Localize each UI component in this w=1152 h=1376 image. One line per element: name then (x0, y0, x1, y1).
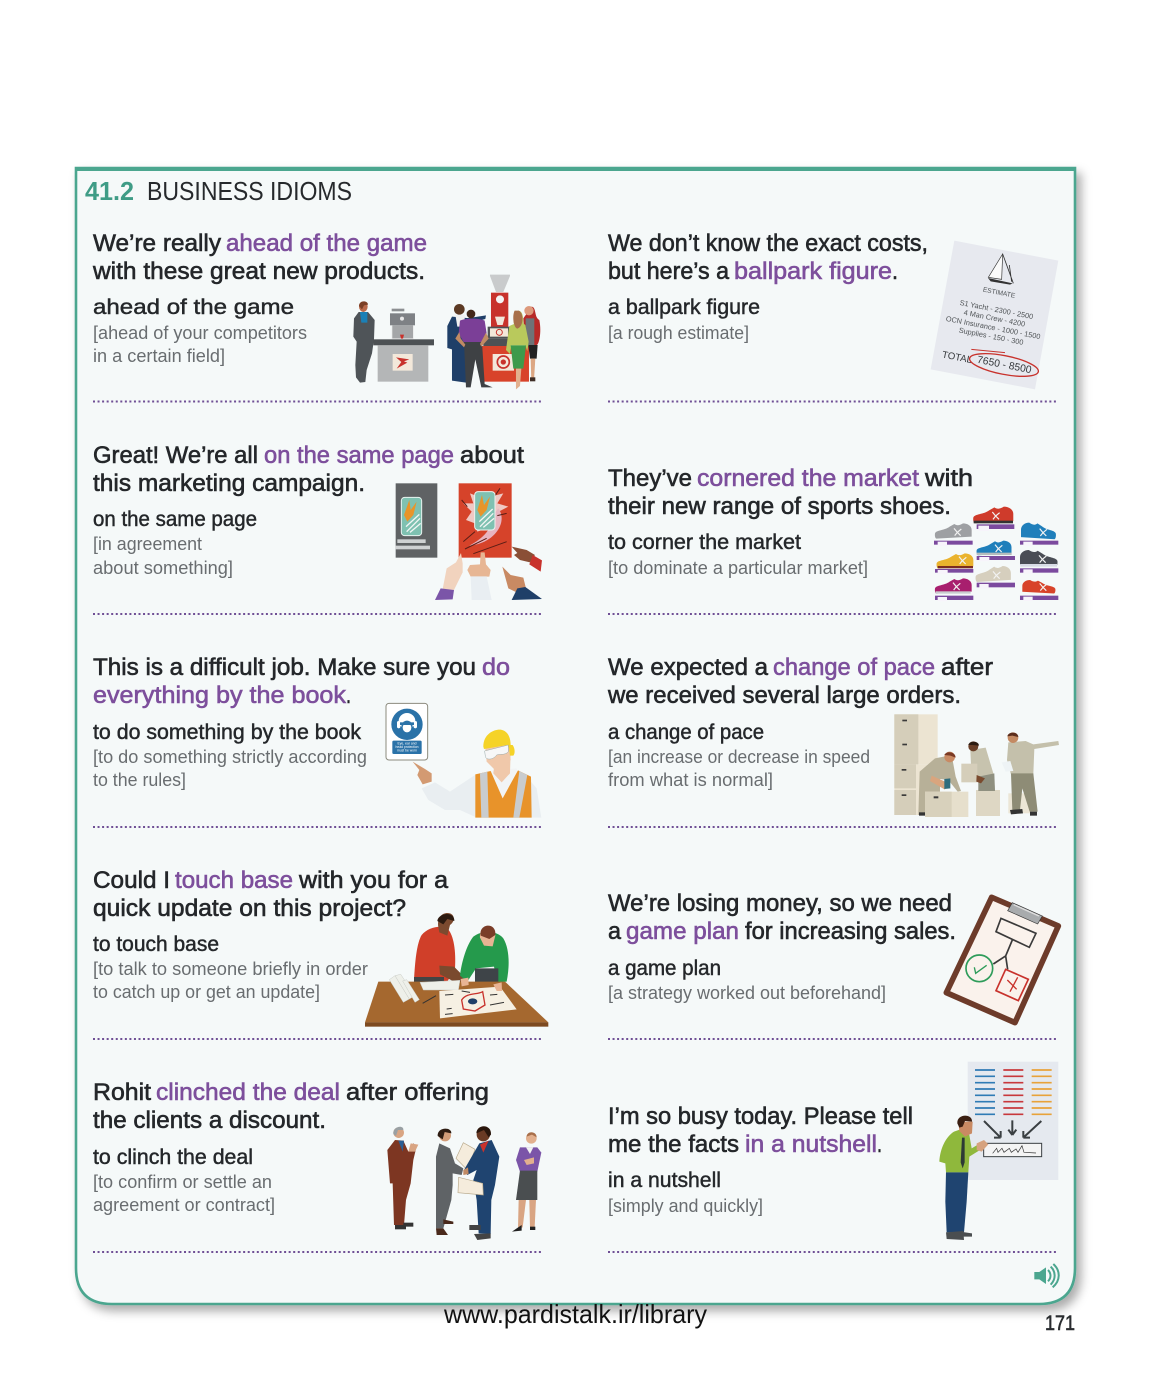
example sentence (93, 867, 449, 922)
illustration: posters and pointing hands (396, 483, 542, 600)
example sentence: touch base (175, 867, 293, 894)
example sentence: after (941, 654, 993, 681)
illustration: sports shoes on shelves (934, 507, 1058, 601)
example sentence: a (608, 918, 622, 945)
example sentence: . (877, 1131, 882, 1158)
illustration: clipboard with decision chart (946, 897, 1058, 1023)
definition: [to do something strictly according (93, 746, 367, 767)
divider (93, 400, 543, 402)
illustration: presenter with summary chart (939, 1062, 1058, 1240)
icon: audio speaker (1034, 1264, 1059, 1287)
definition (93, 533, 233, 578)
illustration: estimate sheet: 4 Man Crew - 4200 (963, 308, 1026, 329)
divider (93, 826, 543, 828)
example sentence (608, 1103, 913, 1158)
divider (93, 1038, 543, 1040)
definition: [in agreement (93, 533, 202, 554)
example sentence (608, 230, 928, 285)
example sentence: everything by the book (93, 682, 347, 709)
definition: [to confirm or settle an (93, 1171, 272, 1192)
idiom term: to touch base (93, 932, 219, 956)
example sentence: with you for a (298, 867, 449, 894)
definition: [simply and quickly] (608, 1195, 763, 1216)
example sentence: They’ve (608, 465, 692, 492)
idiom term: to clinch the deal (93, 1145, 253, 1169)
illustration: business people closing a deal (387, 1126, 541, 1240)
definition: in a certain field] (93, 345, 225, 366)
example sentence: we received several large orders. (607, 682, 961, 709)
example sentence (93, 1079, 489, 1134)
illustration: safety sign and worker: head protection (396, 745, 419, 749)
definition (93, 322, 307, 366)
example sentence: their new range of sports shoes. (608, 493, 951, 520)
idiom: a change of pace (607, 654, 1059, 827)
illustration: safety sign and worker (386, 703, 541, 818)
example sentence: We’re really (93, 230, 221, 257)
example sentence: We don’t know the exact costs, (608, 230, 928, 257)
divider (608, 826, 1058, 828)
example sentence: for increasing sales. (745, 918, 956, 945)
definition: agreement or contract] (93, 1194, 275, 1215)
definition: [to talk to someone briefly in order (93, 958, 368, 979)
example sentence: Rohit (93, 1079, 151, 1106)
definition: [an increase or decrease in speed (608, 746, 870, 767)
definition: [a strategy worked out beforehand] (608, 982, 886, 1003)
example sentence: after offering (346, 1079, 489, 1106)
illustration: estimate sheet: ESTIMATE (982, 287, 1016, 300)
idiom: to touch base (93, 867, 548, 1039)
idiom: to clinch the deal (93, 1079, 543, 1252)
definition (93, 1171, 275, 1215)
illustration: trade show stands (353, 275, 540, 389)
example sentence: ahead of the game (226, 230, 427, 257)
example sentence: ballpark figure (734, 258, 892, 285)
section title: BUSINESS IDIOMS (147, 176, 352, 206)
example sentence: in a nutshell (745, 1131, 877, 1158)
idiom: ahead of the game (92, 230, 543, 402)
example sentence: with these great new products. (92, 258, 425, 285)
panel: business idioms (76, 168, 1075, 1304)
divider (608, 1038, 1058, 1040)
illustration: estimate sheet: TOTAL (941, 349, 973, 366)
example sentence (93, 654, 510, 709)
definition: from what is normal] (608, 769, 773, 790)
illustration: colleagues at a plan table (365, 913, 548, 1027)
example sentence: This is a difficult job. Make sure you (93, 654, 476, 681)
idiom: by the book (93, 654, 543, 827)
divider (608, 613, 1058, 615)
example sentence: do (482, 654, 510, 681)
definition: [ahead of your competitors (93, 322, 307, 343)
example sentence (608, 465, 973, 520)
example sentence: cornered the market (697, 465, 919, 492)
definition: [a rough estimate] (608, 322, 749, 343)
illustration: safety sign and worker: Eye, ear and (398, 741, 417, 745)
panel top edge (75, 167, 1076, 171)
example sentence: . (892, 258, 898, 285)
illustration: warehouse workers and boxes (894, 714, 1059, 817)
idiom term: in a nutshell (608, 1168, 721, 1192)
example sentence: this marketing campaign. (93, 470, 365, 497)
footer url: www.pardistalk.ir/library (443, 1299, 707, 1329)
idiom: on the same page (93, 442, 543, 614)
idiom term: on the same page (93, 507, 257, 531)
illustration: estimate sheet: S1 Yacht - 2300 - 2500 (959, 298, 1034, 321)
example sentence: game plan (626, 918, 739, 945)
example sentence: but here’s a (608, 258, 730, 285)
example sentence: I’m so busy today. Please tell (608, 1103, 913, 1130)
illustration: estimate sheet (931, 241, 1058, 389)
example sentence: quick update on this project? (93, 895, 406, 922)
divider (93, 1251, 543, 1253)
definition (93, 958, 368, 1002)
section number: 41.2 (85, 176, 134, 206)
example sentence: about (460, 442, 524, 469)
illustration: estimate sheet: Supplies - 150 - 300 (958, 326, 1024, 347)
example sentence (93, 442, 524, 497)
divider (608, 1251, 1058, 1253)
idiom term: to corner the market (608, 530, 801, 554)
idiom term: a game plan (608, 956, 721, 980)
divider (93, 613, 543, 615)
idiom term: to do something by the book (93, 720, 361, 744)
example sentence: Could I (93, 867, 170, 894)
idiom: a game plan (608, 890, 1058, 1039)
definition: [to dominate a particular market] (608, 557, 868, 578)
example sentence (608, 890, 956, 945)
example sentence (607, 654, 993, 709)
definition (608, 746, 870, 790)
example sentence: We’re losing money, so we need (608, 890, 952, 917)
example sentence: on the same page (264, 442, 454, 469)
idiom: a ballpark figure (608, 230, 1058, 402)
illustration: safety sign and worker: must be worn (397, 749, 417, 753)
example sentence: We expected a (608, 654, 769, 681)
example sentence: with (924, 465, 973, 492)
idiom term: ahead of the game (93, 295, 294, 319)
example sentence: change of pace (773, 654, 935, 681)
example sentence: the clients a discount. (93, 1107, 326, 1134)
illustration: estimate sheet: 7650 - 8500 (976, 355, 1033, 376)
example sentence (92, 230, 427, 285)
definition: about something] (93, 557, 233, 578)
definition: to catch up or get an update] (93, 981, 320, 1002)
illustration: estimate sheet: OCN Insurance - 1000 - 1500 (945, 314, 1041, 341)
definition (93, 746, 367, 790)
page number: 171 (1045, 1312, 1075, 1335)
idiom term: a ballpark figure (608, 295, 760, 319)
example sentence: . (346, 682, 351, 709)
definition: to the rules] (93, 769, 186, 790)
divider (608, 400, 1058, 402)
example sentence: clinched the deal (156, 1079, 340, 1106)
idiom: in a nutshell (608, 1062, 1058, 1252)
idiom term: a change of pace (608, 720, 764, 744)
example sentence: Great! We’re all (93, 442, 258, 469)
example sentence: me the facts (608, 1131, 739, 1158)
idiom: to corner the market (608, 465, 1058, 614)
